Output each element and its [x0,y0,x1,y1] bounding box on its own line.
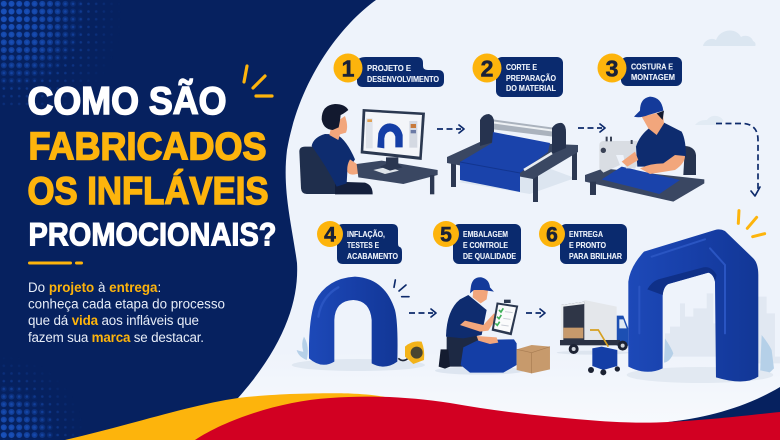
step 2 badge [472,54,563,97]
subtitle text: conheça cada etapa do processo [28,296,225,312]
truck bumper [560,340,620,345]
step 3 badge: MONTAGEM [631,72,675,82]
step 4 badge [317,221,402,264]
icon: yellow sparkle rays [244,66,272,96]
panel: navy title background [0,0,376,440]
table [585,168,704,202]
title underline [28,262,83,264]
step 5 badge: E CONTROLE [463,240,508,250]
subtitle text: Do projeto à entrega: [28,280,161,295]
title: PROMOCIONAIS? [28,216,276,252]
arms [640,155,685,174]
arrow: step 2 to 3 [578,124,605,132]
chair [299,147,337,194]
cap [470,277,494,293]
sewing machine [599,141,640,173]
step 4 badge: ACABAMENTO [347,251,398,261]
rays [394,280,409,297]
step 4 badge: INFLAÇÃO, [347,229,385,239]
step 2 badge: PREPARAÇÃO [506,73,556,83]
monitor stand [380,157,403,171]
step 3 illustration: sewing worker [585,97,704,202]
white ruler [524,153,552,170]
case [461,339,517,373]
skyline [665,293,780,363]
cart with bag [588,330,620,375]
step 1 badge [334,54,444,87]
step 6 badge: 6 [546,224,558,246]
truck [557,300,630,355]
truck shadow [557,351,630,355]
table legs [451,150,577,202]
title [28,79,276,252]
arm [460,313,497,332]
cartons [563,328,583,338]
step 6 badge: PARA BRILHAR [569,251,623,261]
step 1 illustration: designer at computer [299,104,438,194]
arch highlight [318,287,338,317]
head [322,104,348,140]
step 6 illustration: delivery and giant arch [557,211,780,383]
table leg [590,182,596,195]
step 5 badge: EMBALAGEM [463,229,508,239]
icon: cloud [703,31,756,46]
subtitle text [28,280,225,345]
wheels [569,341,628,354]
monitor screen [363,112,422,157]
chair back [683,146,696,175]
truck cab [617,316,628,346]
screen sidebars [366,118,417,148]
subtitle text: fazem sua marca se destacar. [28,330,204,345]
step 1 badge: 1 [342,56,355,82]
shoe [439,349,450,369]
cap [634,97,663,117]
step 6 badge [539,221,627,264]
bottom wave: red [195,397,780,440]
truck rear [561,302,584,340]
shirt [636,123,686,167]
halftone dots bottom left [0,364,74,440]
keyboard [373,167,399,174]
step 6 badge: E PRONTO [569,240,606,250]
step 5 illustration: quality control worker [435,277,550,375]
step 2 badge: CORTE E [506,62,537,72]
machine knobs [601,137,633,153]
step 5 badge: 5 [440,224,452,246]
step 2 badge: DO MATERIAL [506,83,556,93]
arrow: step 3 to step 4 curved [716,124,760,196]
subtitle text: que dá vida aos infláveis que [28,313,199,328]
icon: small cloud [695,116,724,125]
table top [447,141,578,179]
step 1 badge: DESENVOLVIMENTO [367,74,439,84]
arch inner underside [647,267,717,295]
step 4 badge: TESTES E [347,240,379,250]
step 3 badge: COSTURA E [631,62,673,72]
hair [657,111,664,120]
step 1 badge: PROJETO E [367,63,411,73]
arrow: step 5 to 6 [526,309,545,317]
fabric [460,132,550,192]
clipboard [492,300,518,335]
pants [335,182,373,194]
yellow rays [738,211,765,237]
title: OS INFLÁVEIS [28,169,268,213]
pants [447,335,482,367]
shadow [435,367,525,375]
blower [398,341,424,364]
bottom wave: yellow [65,393,385,440]
arch highlights [639,239,725,333]
roller caps [480,114,566,154]
plants [664,335,774,375]
shadow [458,165,575,194]
fabric [602,167,680,194]
shirt [446,295,487,338]
truck box [584,300,617,342]
step 2 illustration: cutting machine [447,114,578,202]
title: FABRICADOS [28,126,266,168]
step 4 badge: 4 [324,224,336,246]
step 6 badge: ENTREGA [569,229,603,239]
arch shadow [627,367,773,383]
roller [490,119,556,137]
step 3 badge: 3 [606,56,618,82]
screen arch [377,123,403,148]
arch [309,277,398,367]
bottom wave: navy [668,387,780,422]
step 4 illustration: inflatable arch and blower [292,277,425,371]
cardboard box [517,345,550,373]
step 5 badge [433,221,521,264]
giant arch [628,229,758,381]
shadow [292,359,425,371]
arrow: step 1 to 2 [437,125,464,133]
arm [347,159,382,175]
title: COMO SÃO [28,79,226,123]
monitor [361,109,425,160]
desk leg [430,175,434,194]
halftone dots top left [0,0,112,106]
shirt [312,134,355,187]
step 3 badge [598,54,682,86]
face [473,288,488,303]
step 2 badge: 2 [481,56,493,82]
step 5 badge: DE QUALIDADE [463,251,516,261]
arrow: step 4 to 5 [409,309,436,317]
face [642,112,664,135]
plant [297,337,308,360]
desk [357,161,438,184]
